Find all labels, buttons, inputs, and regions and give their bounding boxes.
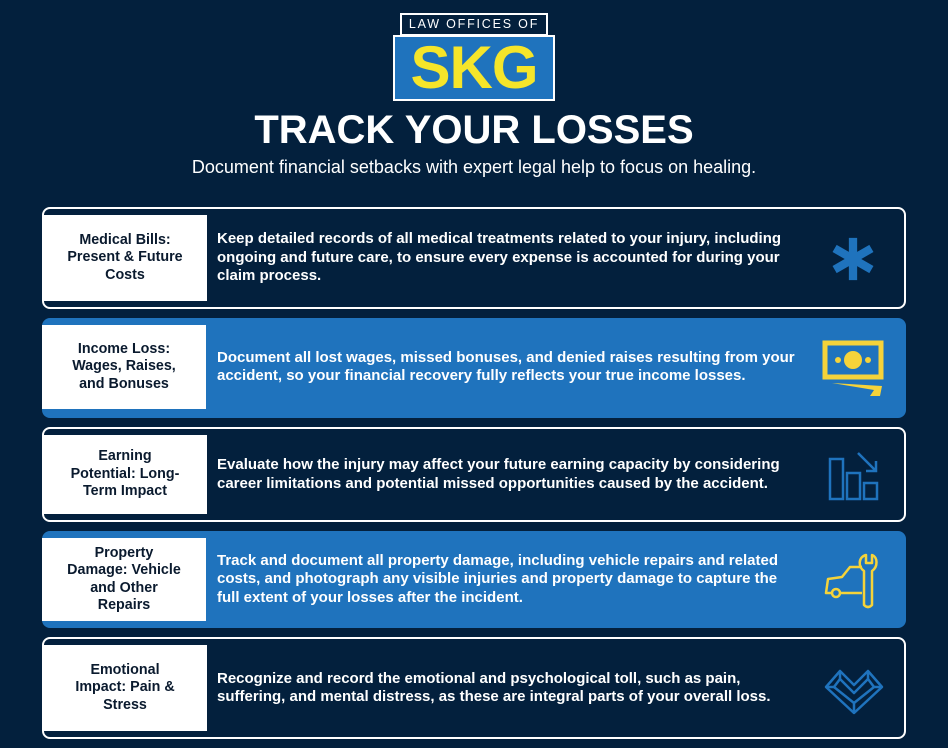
- panel: earning potential: [42, 427, 906, 522]
- panel: property damage: [42, 531, 906, 628]
- logo: [393, 13, 555, 101]
- icon: car and wrench: [824, 554, 878, 608]
- panel: property damage: Property Damage: Vehicle and Other Repairs: [67, 544, 181, 613]
- logo main: SKG: [410, 34, 538, 101]
- panel: income loss: [42, 318, 906, 418]
- icon: money: [822, 340, 884, 396]
- panel: income loss: Document all lost wages, missed bonuses, and denied raises resulting from your accident, so your financial recovery fully reflects your true income losses.: [217, 348, 795, 384]
- panel: earning potential: Earning Potential: Long-Term Impact: [71, 448, 179, 499]
- icon: asterisk: [832, 238, 874, 280]
- title: TRACK YOUR LOSSES: [254, 108, 694, 152]
- panel: emotional impact: [42, 637, 906, 739]
- subtitle: Document financial setbacks with expert legal help to focus on healing.: [192, 157, 756, 177]
- logo top label: [400, 13, 548, 36]
- panel: property damage: Track and document all property damage, including vehicle repairs and related costs, and photograph any visible injuries and property damage to capture the full extent of your losses after the incident.: [217, 552, 778, 606]
- panel: earning potential: Evaluate how the injury may affect your future earning capacity by considering career limitations and potential missed opportunities caused by the accident.: [217, 456, 780, 492]
- logo top label: LAW OFFICES OF: [409, 17, 539, 31]
- panel: emotional impact: Recognize and record the emotional and psychological toll, such as pain, suffering, and mental distress, as these are integral parts of your overall loss.: [217, 670, 771, 705]
- panel: medical bills: Keep detailed records of all medical treatments related to your injury, including ongoing and future care, to ensure every expense is accounted for during your claim process.: [217, 230, 781, 284]
- panel: emotional impact: Emotional Impact: Pain & Stress: [75, 662, 175, 713]
- panel: medical bills: [42, 207, 906, 309]
- panel: income loss: Income Loss: Wages, Raises, and Bonuses: [72, 341, 176, 392]
- panel: medical bills: Medical Bills: Present & Future Costs: [67, 232, 183, 283]
- icon: declining chart: [828, 452, 878, 500]
- icon: geometric heart: [824, 670, 884, 714]
